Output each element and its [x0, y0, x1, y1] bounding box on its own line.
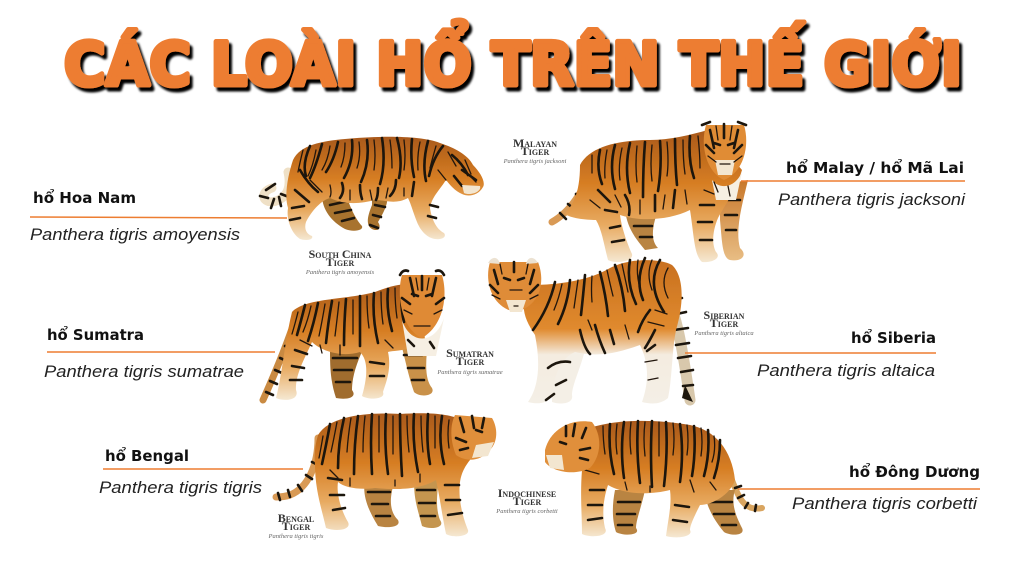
label: hổ Sumatra: hổ Sumatra	[47, 325, 144, 344]
caption: Bengal Tiger: Panthera tigris tigris	[268, 533, 324, 540]
caption: Siberian Tiger: Siberian	[704, 308, 745, 322]
caption: Indochinese Tiger	[495, 486, 558, 515]
label: hổ Sumatra	[44, 325, 275, 381]
caption: Sumatran Tiger	[436, 346, 503, 376]
caption: Sumatran Tiger: Tiger	[456, 354, 484, 368]
label: hổ Sumatra: Panthera tigris sumatrae	[44, 362, 244, 381]
tiger: Malayan	[552, 122, 748, 262]
title: CÁC LOÀI HỔ TRÊN THẾ GIỚI	[64, 18, 962, 100]
label: hổ Hoa Nam: hổ Hoa Nam	[33, 188, 136, 207]
label: hổ Malay / hổ Mã Lai: hổ Malay / hổ Mã Lai	[786, 158, 964, 177]
tiger: Sumatran	[263, 270, 445, 400]
caption: South China Tiger	[305, 247, 375, 276]
caption: Bengal Tiger	[268, 511, 324, 540]
caption: South China Tiger: South China	[309, 247, 372, 261]
label: hổ Malay / hổ Mã Lai: Panthera tigris jacksoni	[778, 190, 966, 209]
caption: Siberian Tiger: Tiger	[710, 316, 738, 330]
caption: Bengal Tiger: Tiger	[282, 519, 310, 533]
label: hổ Bengal: hổ Bengal	[105, 446, 189, 465]
caption: Malayan Tiger	[503, 136, 567, 165]
tiger: Bengal	[276, 413, 496, 536]
caption: Malayan Tiger: Panthera tigris jacksoni	[503, 158, 567, 165]
tiger: Indochinese	[545, 421, 762, 537]
label: hổ Siberia: Panthera tigris altaica	[757, 361, 935, 380]
caption: Sumatran Tiger: Panthera tigris sumatrae	[436, 369, 503, 376]
caption: Malayan Tiger: Malayan	[513, 136, 557, 150]
label: hổ Siberia	[685, 328, 936, 380]
label: hổ Bengal	[99, 446, 303, 497]
caption: Bengal Tiger: Bengal	[278, 511, 314, 525]
label: hổ Malay / hổ Mã Lai	[741, 158, 966, 209]
label: hổ Đông Dương: Panthera tigris corbetti	[792, 494, 978, 513]
label: hổ Hoa Nam	[30, 188, 287, 244]
label: hổ Hoa Nam: Panthera tigris amoyensis	[30, 225, 241, 244]
caption: Siberian Tiger	[693, 308, 754, 337]
caption: Indochinese Tiger: Panthera tigris corbetti	[495, 508, 558, 515]
label: hổ Siberia: hổ Siberia	[851, 328, 936, 347]
tiger: Siberian	[488, 258, 693, 404]
tiger: South China	[260, 137, 484, 240]
caption: Indochinese Tiger: Indochinese	[498, 486, 556, 500]
caption: Malayan Tiger: Tiger	[521, 144, 549, 158]
caption: South China Tiger: Panthera tigris amoyensis	[305, 269, 375, 276]
label: hổ Đông Dương	[738, 462, 980, 513]
caption: Indochinese Tiger: Tiger	[513, 494, 541, 508]
label: hổ Đông Dương: hổ Đông Dương	[849, 462, 980, 481]
label: hổ Bengal: Panthera tigris tigris	[99, 478, 263, 497]
caption: Siberian Tiger: Panthera tigris altaica	[693, 330, 754, 337]
caption: Sumatran Tiger: Sumatran	[446, 346, 494, 360]
caption: South China Tiger: Tiger	[326, 255, 354, 269]
